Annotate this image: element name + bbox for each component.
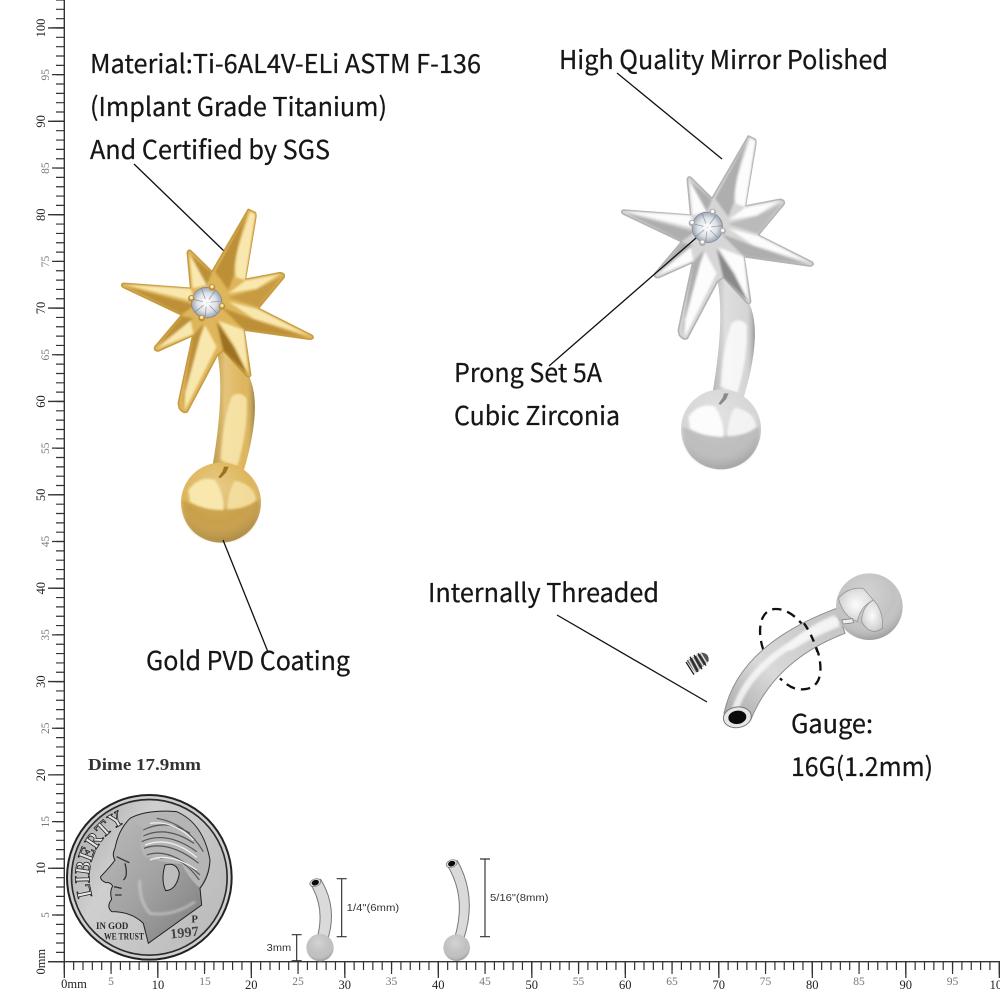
in god we trust text — [96, 921, 144, 941]
horizontal ruler: 65 — [666, 976, 678, 988]
vertical ruler: 95 — [40, 69, 52, 80]
gold piece gem — [188, 284, 225, 321]
heading: material: And Certified by SGS — [90, 130, 330, 167]
silver bar — [713, 277, 755, 397]
size label: 5/16 inch: 5/16"(8mm) — [490, 892, 548, 904]
coin profile portrait — [101, 811, 210, 943]
size label: 1/4 inch: 1/4"(6mm) — [347, 902, 399, 914]
label: prong set: Prong Set 5A — [454, 353, 602, 390]
horizontal ruler: 75 — [760, 976, 772, 988]
label: prong set: Cubic Zirconia — [454, 396, 620, 433]
vertical ruler: 75 — [40, 256, 52, 267]
bar highlight — [735, 615, 840, 710]
label: gold coating: Gold PVD Coating — [146, 641, 350, 678]
in god we trust text: WE TRUST — [104, 931, 144, 941]
leader line: prong set — [549, 238, 696, 366]
horizontal ruler: 45 — [479, 976, 491, 988]
leader line: gold coating — [223, 540, 268, 652]
label: internally threaded: Internally Threaded — [428, 573, 659, 610]
vertical ruler: 15 — [40, 816, 52, 827]
horizontal ruler: 0mm — [61, 977, 87, 991]
dashed gauge ellipse, back — [760, 609, 820, 689]
horizontal ruler: 25 — [292, 976, 304, 988]
threaded bar detail — [686, 573, 903, 730]
vertical ruler: 40 — [34, 582, 48, 594]
liberty text: LIBERTY — [74, 810, 123, 900]
vertical ruler: 0mm — [34, 949, 48, 975]
leader line: material — [134, 164, 224, 251]
vertical ruler: 90 — [34, 115, 48, 128]
horizontal ruler: 20 — [245, 978, 258, 992]
silver jewelry piece — [622, 136, 813, 469]
dimension: 8mm — [480, 859, 490, 937]
mint mark: P — [191, 915, 198, 926]
dime coin — [66, 794, 233, 961]
heading: material: Material:Ti-6AL4V-ELi ASTM F-136 — [90, 44, 481, 81]
horizontal ruler: 85 — [853, 976, 865, 988]
vertical ruler: 55 — [40, 442, 52, 454]
vertical ruler: 5 — [40, 912, 52, 918]
horizontal ruler: 80 — [806, 978, 819, 992]
in god we trust text: IN GOD — [96, 921, 129, 931]
horizontal ruler: 60 — [619, 978, 632, 992]
vertical ruler: 70 — [34, 302, 48, 314]
label: gauge — [791, 704, 933, 784]
vertical ruler — [34, 0, 64, 975]
horizontal ruler: 55 — [573, 976, 584, 988]
horizontal ruler: 5 — [108, 976, 114, 988]
small 6mm bar — [306, 877, 334, 961]
gold bar — [213, 350, 255, 470]
vertical ruler: 35 — [40, 629, 52, 641]
loose screw — [686, 652, 709, 675]
horizontal ruler: 70 — [713, 978, 725, 992]
vertical ruler: 10 — [34, 862, 48, 875]
dimension: 3mm — [292, 935, 302, 961]
horizontal ruler: 30 — [339, 978, 351, 992]
open bar end — [722, 705, 753, 730]
size label: 3mm ball: 3mm — [267, 942, 291, 954]
horizontal ruler — [48, 962, 1000, 992]
vertical ruler: 30 — [34, 675, 48, 688]
heading: material — [90, 44, 481, 167]
horizontal ruler: 10 — [152, 978, 164, 992]
vertical ruler: 100 — [34, 19, 48, 37]
label: gauge: 16G(1.2mm) — [791, 747, 933, 784]
silver ball — [681, 389, 761, 469]
leader line: mirror polished — [617, 73, 722, 159]
label: mirror polished: High Quality Mirror Polished — [559, 40, 888, 77]
vertical ruler: 50 — [34, 489, 48, 501]
vertical ruler: 60 — [34, 395, 48, 408]
horizontal ruler: 35 — [386, 976, 398, 988]
silver star — [622, 136, 813, 339]
leader line: internally threaded — [557, 615, 707, 702]
horizontal ruler: 50 — [526, 978, 538, 992]
size comparison pieces — [292, 858, 490, 961]
coin lettering: liberty — [89, 825, 121, 896]
gold ball — [181, 463, 261, 543]
curved bar — [724, 608, 845, 720]
vertical ruler: 25 — [40, 722, 52, 734]
dashed gauge ellipse, front — [804, 623, 817, 652]
horizontal ruler: 40 — [432, 978, 445, 992]
vertical ruler: 65 — [40, 349, 52, 361]
coin date: 1997 — [170, 925, 200, 943]
threaded end ball — [836, 573, 903, 640]
gold star — [122, 209, 313, 412]
horizontal ruler: 90 — [900, 978, 912, 992]
silver piece gem — [689, 209, 726, 246]
horizontal ruler: 15 — [199, 976, 211, 988]
coin body — [66, 794, 233, 961]
gold jewelry piece — [122, 209, 313, 543]
vertical ruler: 20 — [34, 769, 48, 781]
vertical ruler: 45 — [40, 536, 52, 547]
horizontal ruler: 95 — [947, 976, 958, 988]
vertical ruler: 85 — [40, 162, 52, 174]
dimension: 6mm — [337, 879, 347, 937]
label: gauge: Gauge: — [791, 704, 873, 741]
vertical ruler: 80 — [34, 209, 48, 221]
label: dime size: Dime 17.9mm — [88, 755, 201, 774]
large 8mm bar — [443, 858, 470, 961]
label: prong set — [454, 353, 620, 433]
heading: material: (Implant Grade Titanium) — [90, 87, 387, 124]
